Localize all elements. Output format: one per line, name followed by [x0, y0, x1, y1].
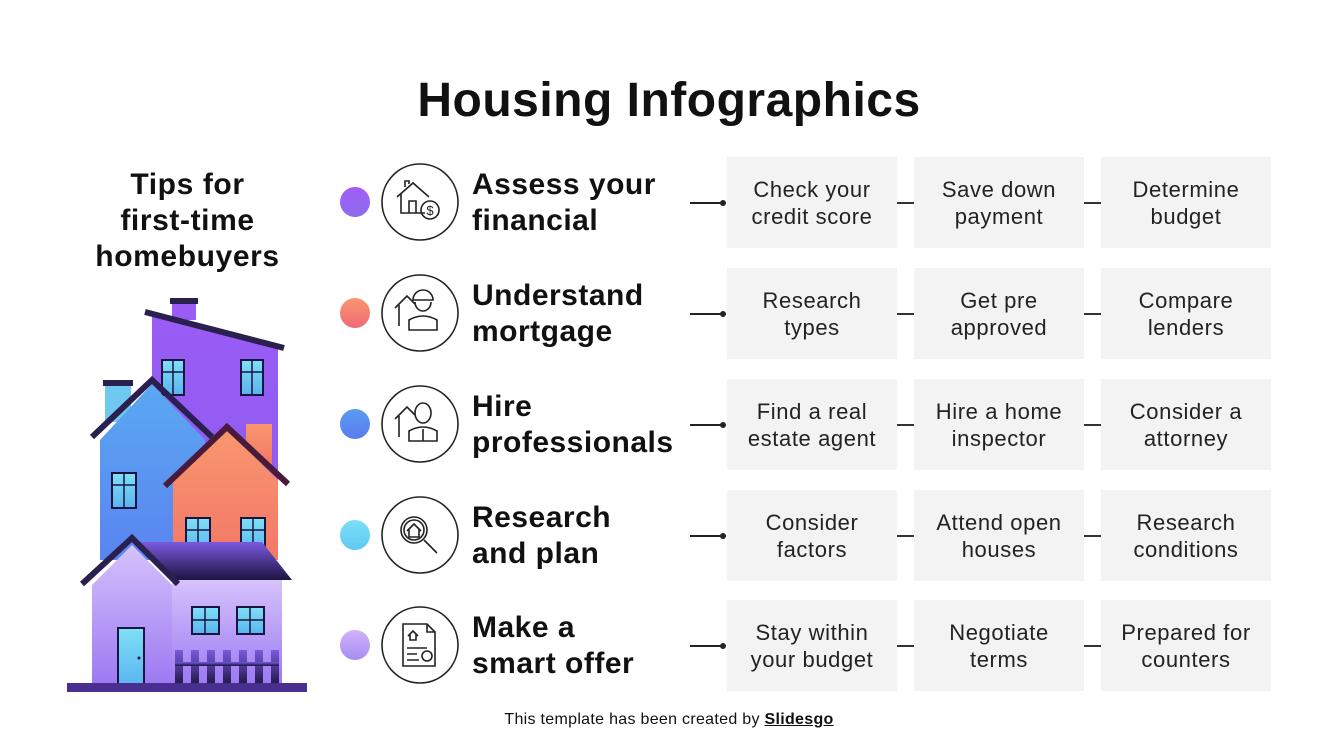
- connectors: [690, 202, 724, 204]
- row 1: [340, 163, 656, 241]
- text: Hire a home: [936, 398, 1062, 424]
- label: [472, 501, 611, 570]
- label: financial: [472, 204, 598, 237]
- subtitle: first-time: [120, 204, 255, 237]
- step boxes row 4: [727, 490, 1271, 581]
- text: credit score: [752, 204, 872, 228]
- icon: builder: [381, 274, 459, 352]
- purple tall house: [145, 298, 284, 560]
- label: Understand: [472, 279, 644, 312]
- text: estate agent: [748, 426, 876, 450]
- text: counters: [1141, 646, 1231, 672]
- icon: house with dollar: $: [426, 203, 434, 218]
- text: budget: [1151, 204, 1221, 228]
- text: Consider a: [1130, 398, 1242, 424]
- bullet dot: [340, 409, 370, 439]
- subtitle: homebuyers: [95, 240, 280, 273]
- text: Stay within: [756, 620, 868, 644]
- bullet dot: [340, 298, 370, 328]
- text: inspector: [952, 426, 1046, 450]
- text: attorney: [1144, 426, 1228, 450]
- icon: agent: [381, 385, 459, 463]
- text: payment: [955, 204, 1043, 228]
- step boxes row 5: [727, 600, 1271, 691]
- text: Check your: [753, 176, 871, 202]
- label: smart offer: [472, 647, 634, 680]
- text: Negotiate: [949, 620, 1049, 644]
- row 4: [340, 496, 611, 574]
- text: conditions: [1133, 536, 1239, 562]
- bullet dot: [340, 187, 370, 217]
- row 3: [340, 385, 674, 463]
- row 2: [340, 274, 644, 352]
- front house: [67, 538, 307, 692]
- text: terms: [970, 646, 1028, 672]
- bullet dot: [340, 630, 370, 660]
- step boxes row 3: [727, 379, 1271, 470]
- row 5: [340, 606, 634, 684]
- orange house: [165, 427, 288, 560]
- step boxes row 1: [727, 157, 1271, 248]
- text: approved: [951, 314, 1047, 340]
- text: Save down: [942, 176, 1056, 202]
- label: and plan: [472, 537, 599, 570]
- text: Research: [763, 288, 861, 312]
- label: Hire: [472, 390, 532, 423]
- text: Attend open: [936, 510, 1062, 534]
- text: Find a real: [757, 398, 867, 424]
- icon: house with dollar: [381, 163, 459, 241]
- text: factors: [777, 536, 847, 562]
- text: Prepared for: [1121, 620, 1251, 644]
- text: lenders: [1148, 314, 1224, 340]
- text: your budget: [751, 646, 873, 672]
- text: Compare: [1139, 288, 1233, 312]
- label: mortgage: [472, 315, 613, 348]
- label: Assess your: [472, 168, 656, 201]
- blue house: [92, 380, 212, 560]
- label: Make a: [472, 611, 575, 644]
- icon: magnifier house: [381, 496, 459, 574]
- text: houses: [962, 536, 1036, 562]
- title: Housing Infographics: [417, 74, 921, 127]
- label: [472, 279, 644, 348]
- icon: contract: [381, 606, 459, 684]
- label: Research: [472, 501, 611, 534]
- text: Get pre: [960, 288, 1038, 312]
- bullet dot: [340, 520, 370, 550]
- text: Research: [1136, 510, 1235, 534]
- footer: This template has been created by Slidesgo: [504, 711, 834, 728]
- label: [472, 168, 656, 237]
- text: Determine: [1133, 176, 1239, 202]
- text: types: [784, 314, 840, 340]
- illustration: houses: [67, 298, 307, 692]
- label: professionals: [472, 426, 674, 459]
- subtitle: Tips for: [130, 168, 245, 201]
- subtitle: [95, 168, 280, 273]
- step boxes row 2: [727, 268, 1271, 359]
- label: [472, 390, 674, 459]
- text: Consider: [766, 510, 858, 534]
- label: [472, 611, 634, 680]
